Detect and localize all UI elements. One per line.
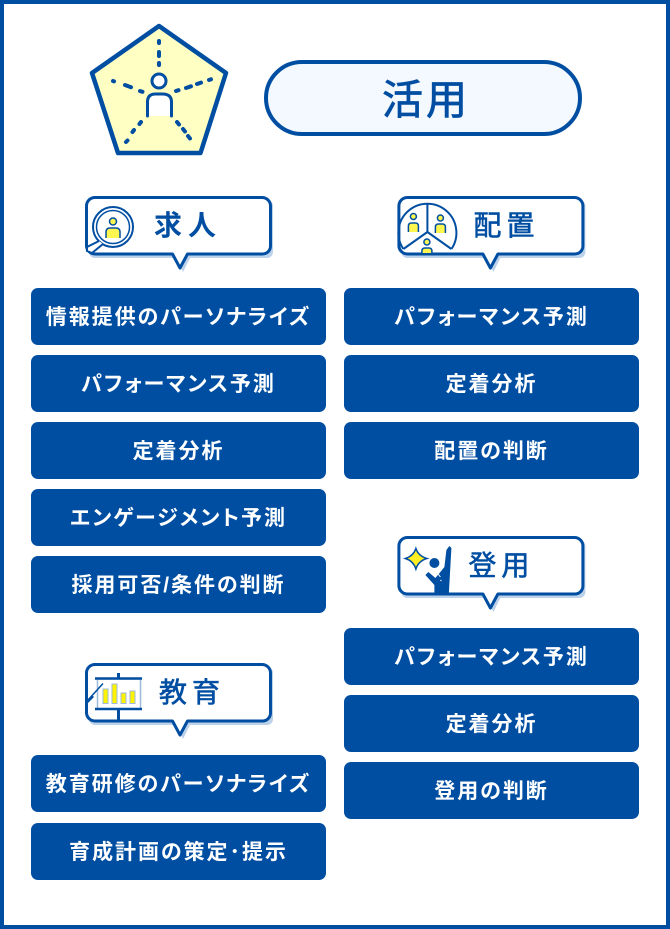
button: パフォーマンス予測 (求人): パフォーマンス予測	[81, 373, 276, 396]
title pill: 活用	[382, 77, 470, 123]
button: 育成計画の策定・提示: 育成計画の策定･提示	[69, 841, 288, 864]
button: パフォーマンス予測 (登用): パフォーマンス予測	[394, 646, 589, 669]
button: エンゲージメント予測: エンゲージメント予測	[70, 507, 287, 530]
callout: 配置	[398, 198, 585, 272]
button: 情報提供のパーソナライズ	[31, 288, 326, 345]
callout: 求人: 求人	[154, 210, 222, 241]
callout: 求人	[86, 198, 273, 272]
button: 教育研修のパーソナライズ	[31, 755, 326, 812]
button: 登用の判断: 登用の判断	[434, 780, 549, 803]
icon: sparkle and raised-hand person	[405, 546, 451, 592]
callout: 教育	[86, 664, 273, 739]
callout: 配置: 配置	[473, 210, 539, 241]
button: 定着分析 (配置)	[344, 355, 639, 412]
button: エンゲージメント予測	[31, 489, 326, 546]
button: 配置の判断: 配置の判断	[434, 440, 549, 463]
icon: three people in divided circle	[398, 204, 456, 253]
button: 育成計画の策定・提示	[31, 823, 326, 880]
icon: magnifier with person	[87, 207, 133, 253]
icon: pentagon with person	[92, 26, 226, 153]
button: 採用可否/条件の判断	[31, 556, 326, 613]
button: 配置の判断	[344, 422, 639, 479]
button: 定着分析 (求人)	[31, 422, 326, 479]
icon: presentation board with bar chart	[87, 673, 142, 720]
button: 登用の判断	[344, 762, 639, 819]
callout: 登用: 登用	[468, 550, 534, 581]
button: パフォーマンス予測 (求人)	[31, 355, 326, 412]
button: 情報提供のパーソナライズ: 情報提供のパーソナライズ	[46, 306, 311, 329]
button: 採用可否/条件の判断: 採用可否/条件の判断	[71, 574, 286, 597]
button: 定着分析 (求人): 定着分析	[133, 440, 224, 463]
button: パフォーマンス予測 (登用)	[344, 628, 639, 685]
callout: 教育: 教育	[159, 677, 225, 708]
button: パフォーマンス予測 (配置): パフォーマンス予測	[394, 306, 589, 329]
button: 定着分析 (配置): 定着分析	[446, 373, 537, 396]
button: 教育研修のパーソナライズ: 教育研修のパーソナライズ	[46, 773, 311, 796]
title pill	[266, 62, 580, 134]
button: 定着分析 (登用)	[344, 695, 639, 752]
button: パフォーマンス予測 (配置)	[344, 288, 639, 345]
button: 定着分析 (登用): 定着分析	[446, 713, 537, 736]
callout: 登用	[399, 538, 585, 612]
